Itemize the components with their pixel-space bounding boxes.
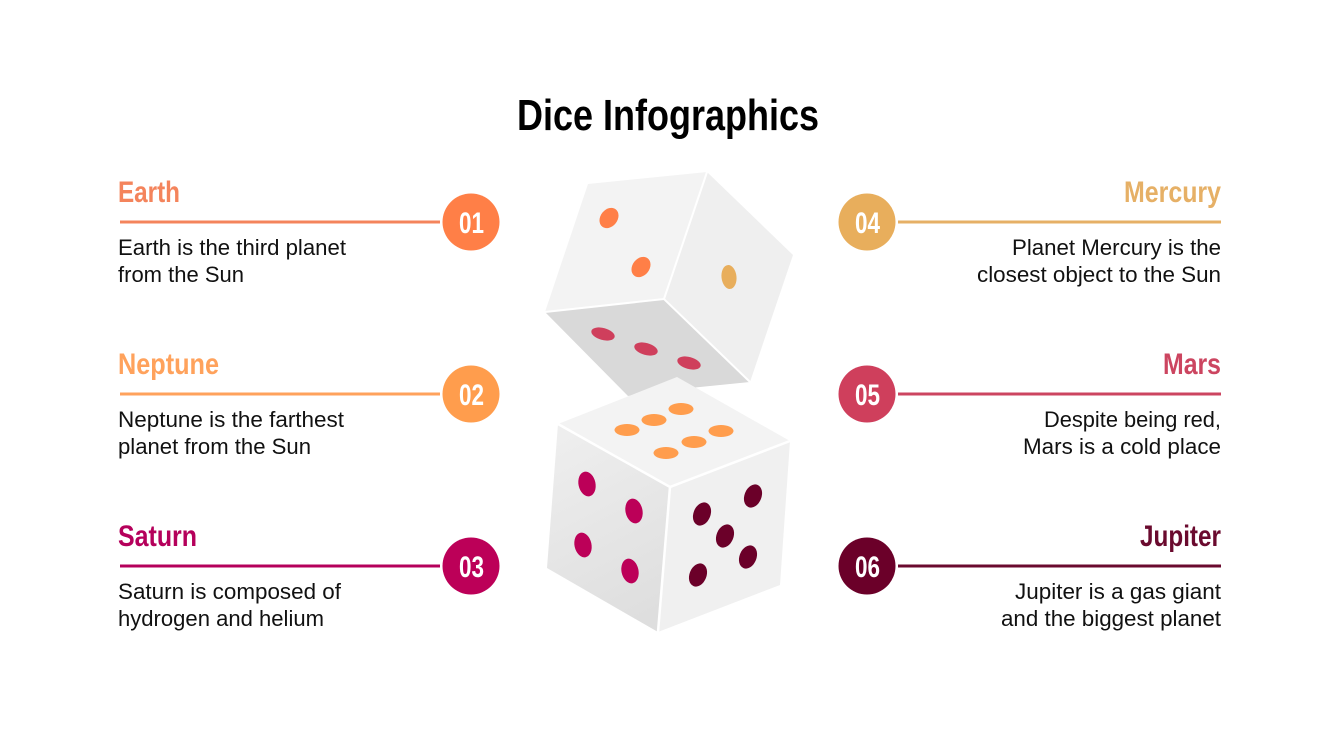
panel: Neptune [118,348,500,459]
panel: Saturn: Saturn is composed of [118,579,342,604]
panel: Neptune: planet from the Sun [118,434,311,459]
icon: lower die [547,377,790,632]
panel: Jupiter [838,520,1221,631]
panel: Earth [118,176,500,287]
panel: Mercury: Planet Mercury is the [1012,235,1221,260]
panel: Earth: 01 [459,207,484,240]
panel: Neptune: 02 [459,379,484,412]
panel: Earth: Earth is the third planet [118,235,346,260]
panel: Mars: Mars [1163,348,1221,381]
panel: Mars: Despite being red, [1044,407,1221,432]
panel: Earth: Earth [118,176,180,209]
panel: Jupiter: Jupiter [1140,520,1221,553]
panel: Jupiter: Jupiter is a gas giant [1015,579,1221,604]
panel: Saturn [118,520,500,631]
icon: upper die [545,172,793,396]
panel: Mars [838,348,1221,459]
panel: Saturn: hydrogen and helium [118,606,324,631]
panel: Mars: Mars is a cold place [1023,434,1221,459]
panel: Jupiter: and the biggest planet [1001,606,1221,631]
panel: Saturn: 03 [459,551,484,584]
title: Dice Infographics [517,91,819,140]
panel: Neptune: Neptune [118,348,219,381]
panel: Jupiter: 06 [855,551,880,584]
panel: Mercury [838,176,1221,287]
panel: Earth: from the Sun [118,262,244,287]
panel: Mercury: closest object to the Sun [977,262,1221,287]
panel: Mercury: 04 [855,207,880,240]
panel: Mars: 05 [855,379,880,412]
panel: Mercury: Mercury [1124,176,1221,209]
panel: Neptune: Neptune is the farthest [118,407,344,432]
panel: Saturn: Saturn [118,520,197,553]
